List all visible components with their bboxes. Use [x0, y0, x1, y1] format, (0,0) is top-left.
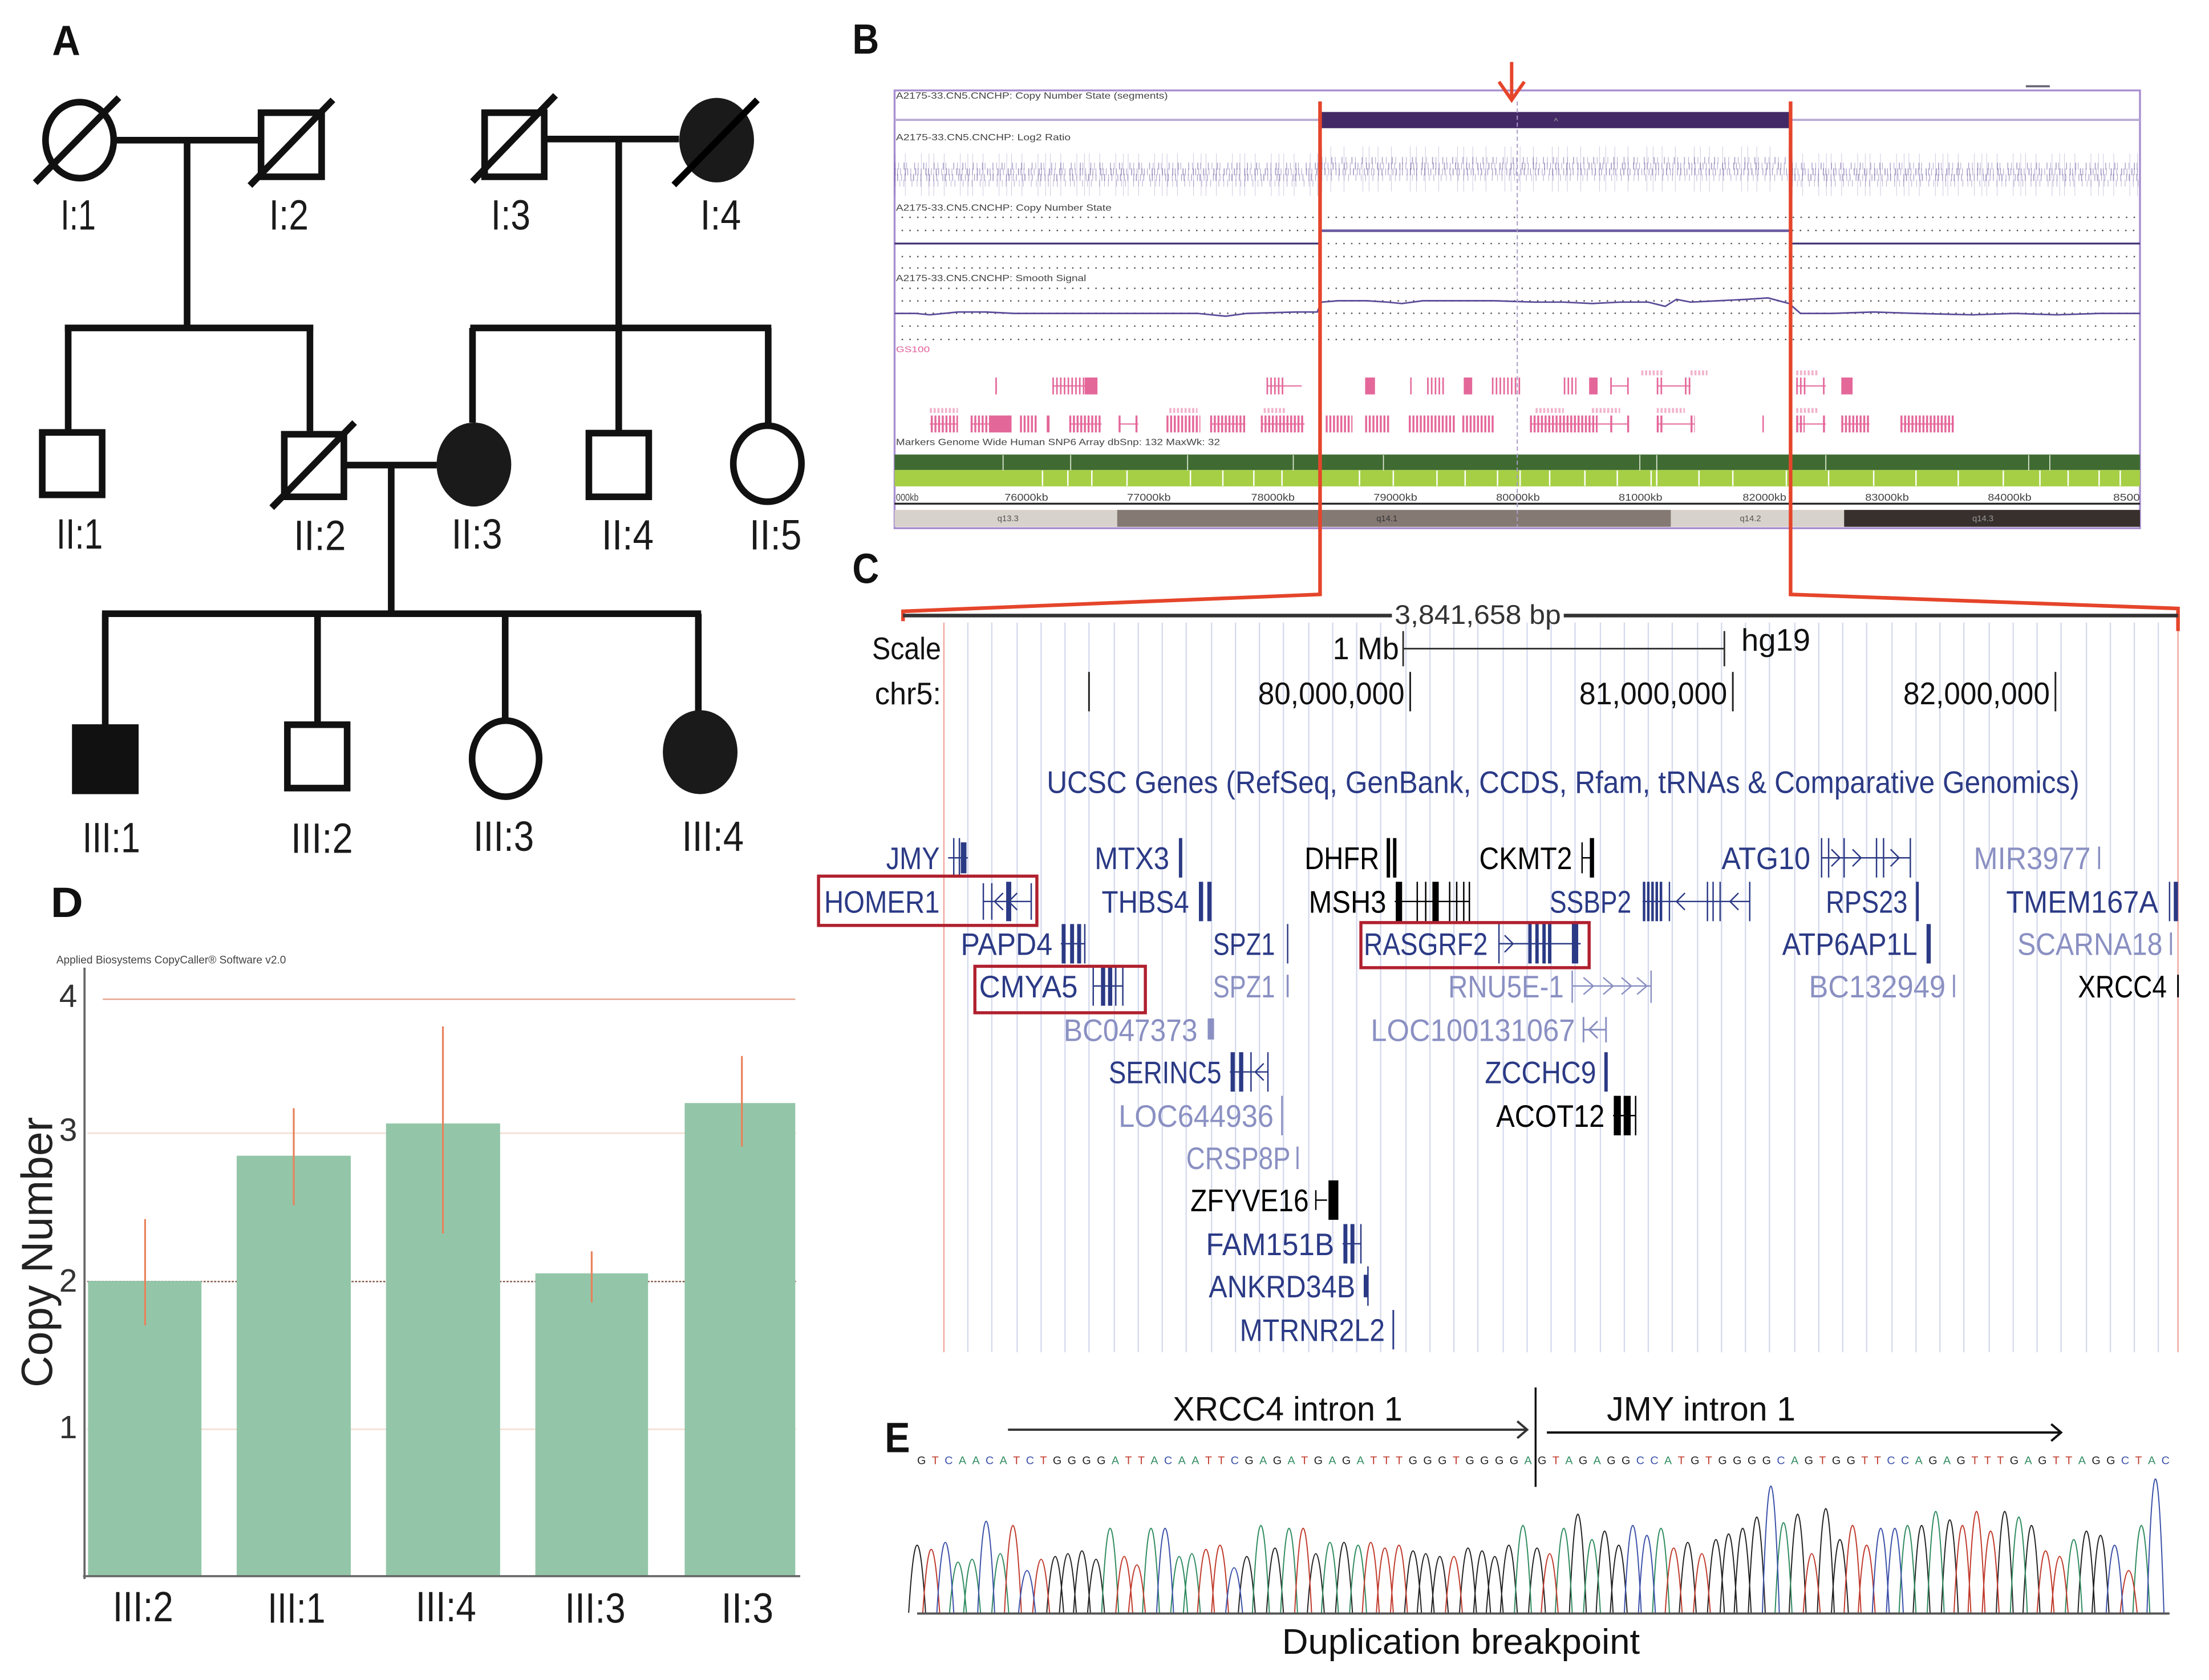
individual I:1: I:1 — [60, 192, 96, 239]
individual I:2 — [250, 100, 333, 239]
individual II:4 — [589, 433, 654, 558]
gene JMY — [886, 838, 968, 878]
scale row: hg19 — [1741, 623, 1810, 658]
panel label C: C — [852, 545, 879, 593]
panel A: pedigree — [35, 17, 801, 862]
breakpoint vertical line — [1535, 1387, 1536, 1487]
genomic coordinate axis: 76000kb — [1004, 492, 1048, 503]
genomic coordinate axis: 000kb — [896, 492, 918, 503]
individual II:2: II:2 — [294, 512, 346, 559]
bar II:3 — [684, 1103, 795, 1576]
bar III:3 — [536, 1273, 648, 1576]
gene RASGRF2 in red box — [1361, 923, 1589, 968]
gene SPZ1 upper: SPZ1 — [1213, 927, 1275, 962]
gene SCARNA18: SCARNA18 — [2017, 927, 2162, 962]
track titles: GS100 — [896, 346, 930, 355]
individual II:5: II:5 — [749, 511, 801, 558]
copy number and smooth signal dotted grid — [902, 217, 2137, 339]
individual II:1: II:1 — [56, 510, 103, 558]
individual I:4 — [674, 98, 757, 239]
segment track with duplication bar — [894, 85, 2140, 128]
gene TMEM167A: TMEM167A — [2006, 885, 2159, 920]
individual I:4: I:4 — [700, 192, 741, 239]
gene CMYA5 in red box — [975, 966, 1145, 1013]
red zoom lines connecting panels B and C — [903, 102, 2178, 631]
pedigree connecting lines — [65, 139, 771, 725]
JMY arrow — [1547, 1424, 2061, 1441]
microarray frame — [894, 91, 2140, 528]
chromatogram traces — [909, 1479, 2164, 1613]
gene ATP6AP1L: ATP6AP1L — [1782, 927, 1918, 962]
individual III:2: III:2 — [291, 815, 353, 862]
individual II:4: II:4 — [602, 511, 654, 558]
gene HOMER1 in red box — [818, 876, 1037, 926]
gene CRSP8P: CRSP8P — [1186, 1141, 1291, 1176]
gene CMYA5 in red box: CMYA5 — [979, 969, 1078, 1004]
genomic coordinate axis: 8500 — [2113, 492, 2140, 503]
gene ZCCHC9: ZCCHC9 — [1485, 1055, 1596, 1090]
bar III:4 — [386, 1123, 500, 1576]
x axis labels: II:3 — [722, 1584, 773, 1632]
gene RASGRF2 in red box: RASGRF2 — [1364, 927, 1487, 962]
panel label A: A — [52, 17, 80, 64]
chromosome cytoband track — [894, 510, 2140, 527]
base call sequence: G T C AA C A T C T GGGG A TT A C AA TT C G A G A T G A G A TTT GGG T GGGG A G T A G A GG CC A T G T GGGG C A G T GG TT CC A G A G TTT G A G TT A GG C T A C — [917, 1455, 2170, 1467]
gene SERINC5: SERINC5 — [1109, 1055, 1222, 1090]
gene ANKRD34B: ANKRD34B — [1209, 1269, 1355, 1304]
y axis numbers: 2 — [59, 1263, 77, 1299]
genomic coordinate axis: 83000kb — [1865, 492, 1909, 503]
bar III:1 — [237, 1156, 351, 1576]
panel label D: D — [51, 879, 83, 926]
individual II:2 — [271, 423, 355, 559]
gene track title: UCSC Genes (RefSeq, GenBank, CCDS, Rfam, tRNAs & Comparative Genomics) — [1047, 765, 2080, 800]
track titles: A2175-33.CN5.CNCHP: Copy Number State — [896, 202, 1112, 213]
individual II:5 — [733, 425, 801, 558]
individual III:3: III:3 — [473, 813, 534, 860]
XRCC4 arrow — [1008, 1421, 1527, 1438]
gene LOC644936: LOC644936 — [1118, 1099, 1274, 1134]
scale row: 1 Mb — [1333, 631, 1399, 666]
x axis labels — [113, 1583, 773, 1632]
gene RPS23: RPS23 — [1826, 885, 1907, 920]
smooth signal trace — [894, 298, 2140, 316]
track titles: Markers Genome Wide Human SNP6 Array dbSnp: 132 MaxWk: 32 — [896, 437, 1220, 448]
genomic coordinate axis: 78000kb — [1251, 492, 1295, 503]
genomic coordinate axis: 80000kb — [1496, 492, 1540, 503]
genomic coordinate axis: 77000kb — [1127, 492, 1171, 503]
genomic coordinate axis: 79000kb — [1373, 492, 1417, 503]
genomic coordinate axis — [894, 492, 2140, 504]
x axis labels: III:2 — [113, 1583, 173, 1630]
individual I:2: I:2 — [269, 192, 309, 239]
genomic coordinate axis: 81000kb — [1619, 492, 1663, 503]
chromatogram baseline — [917, 1613, 2170, 1614]
XRCC4 intron label: XRCC4 intron 1 — [1173, 1390, 1403, 1428]
individual II:3: II:3 — [452, 510, 502, 558]
gene JMY: JMY — [886, 841, 940, 876]
gene LOC100131067: LOC100131067 — [1371, 1013, 1575, 1048]
y axis numbers: 3 — [59, 1113, 77, 1149]
software caption: Applied Biosystems CopyCaller® Software v2.0 — [56, 953, 286, 966]
x axis labels: III:3 — [565, 1584, 626, 1632]
pink gene tracks — [930, 373, 1954, 424]
bar III:2 — [88, 1281, 201, 1576]
duplication breakpoint caption: Duplication breakpoint — [1282, 1622, 1640, 1662]
gene BC132949: BC132949 — [1809, 969, 1945, 1004]
genomic coordinate axis: 84000kb — [1988, 492, 2032, 503]
individual II:3 — [436, 423, 511, 558]
panel B: microarray copy number plot — [852, 15, 2140, 528]
panel C: UCSC genome browser view — [818, 102, 2178, 1352]
error bars — [145, 1026, 742, 1325]
gene MIR3977: MIR3977 — [1974, 841, 2091, 876]
gene SPZ1 lower: SPZ1 — [1213, 969, 1275, 1004]
gene FAM151B: FAM151B — [1206, 1227, 1334, 1262]
x axis labels: III:4 — [416, 1583, 476, 1630]
chromosome cytoband track: q14.3 — [1972, 514, 1993, 524]
gene MTX3: MTX3 — [1095, 841, 1169, 876]
individual II:1 — [42, 432, 103, 558]
chromosome coordinate row: chr5: — [875, 676, 941, 711]
gene DHFR: DHFR — [1304, 841, 1379, 876]
gene SSBP2 — [1550, 882, 1750, 921]
gene ZFYVE16: ZFYVE16 — [1190, 1183, 1309, 1218]
panel D: copy number bar chart — [13, 879, 800, 1632]
browser vertical grid — [944, 623, 2178, 1352]
panel label B: B — [852, 15, 879, 63]
individual I:3 — [472, 95, 556, 239]
gene XRCC4: XRCC4 — [2078, 969, 2167, 1004]
gene PAPD4: PAPD4 — [961, 927, 1052, 962]
chromosome coordinate row — [875, 672, 2056, 711]
gene ATG10 — [1721, 838, 1910, 878]
genomic coordinate axis: 82000kb — [1742, 492, 1786, 503]
track titles: A2175-33.CN5.CNCHP: Smooth Signal — [896, 273, 1086, 283]
JMY intron label: JMY intron 1 — [1607, 1390, 1795, 1428]
gene RNU5E-1: RNU5E-1 — [1448, 969, 1564, 1004]
track titles: A2175-33.CN5.CNCHP: Copy Number State (segments) — [896, 91, 1168, 101]
region size bar: 3,841,658 bp — [1395, 600, 1561, 630]
chromosome coordinate row: 81,000,000 — [1579, 676, 1727, 711]
individual I:3: I:3 — [491, 192, 530, 239]
scale row — [872, 623, 1810, 666]
copy number state line — [894, 243, 2140, 244]
individual III:1 — [72, 724, 140, 861]
gene MSH3 — [1309, 882, 1469, 921]
panel label E: E — [885, 1414, 910, 1462]
green marker tracks — [894, 455, 2140, 486]
chromosome coordinate row: 82,000,000 — [1903, 676, 2050, 711]
individual III:1: III:1 — [82, 814, 140, 861]
gene MTRNR2L2: MTRNR2L2 — [1240, 1313, 1385, 1348]
gene ACOT12: ACOT12 — [1496, 1099, 1604, 1134]
individual III:2 — [287, 725, 353, 862]
y axis numbers — [59, 979, 77, 1446]
chromosome cytoband track: q13.3 — [998, 514, 1019, 524]
y axis numbers: 4 — [59, 979, 77, 1015]
gene CKMT2: CKMT2 — [1480, 841, 1572, 876]
red arrow — [1499, 62, 1525, 100]
chromosome cytoband track: q14.2 — [1740, 514, 1761, 524]
gene RNU5E-1 — [1448, 969, 1651, 1004]
gene ATG10: ATG10 — [1721, 841, 1810, 876]
chromosome cytoband track: q14.1 — [1376, 514, 1397, 524]
panel E: sequencing chromatogram — [885, 1387, 2170, 1662]
x axis labels: III:1 — [267, 1584, 326, 1632]
chromosome coordinate row: 80,000,000 — [1258, 676, 1405, 711]
scale row: Scale — [872, 631, 941, 666]
log2 ratio scatter — [894, 161, 2140, 183]
gene MSH3: MSH3 — [1309, 885, 1387, 920]
track titles: A2175-33.CN5.CNCHP: Log2 Ratio — [896, 132, 1071, 143]
individual III:3 — [472, 721, 539, 860]
axes — [83, 968, 800, 1579]
chart gridlines — [87, 999, 796, 1429]
gene BC047373: BC047373 — [1064, 1013, 1198, 1048]
gene THBS4: THBS4 — [1102, 885, 1189, 920]
centre position dashed marker — [1517, 102, 1518, 527]
y axis title: Copy Number — [13, 1117, 62, 1387]
track titles — [896, 91, 1220, 448]
segment track with duplication bar: ^ — [1554, 117, 1558, 126]
individual III:4: III:4 — [682, 813, 744, 860]
gene SSBP2: SSBP2 — [1550, 885, 1631, 920]
individual I:1 — [35, 98, 119, 239]
gene HOMER1 in red box: HOMER1 — [824, 885, 940, 920]
individual III:4 — [663, 710, 744, 860]
y axis numbers: 1 — [59, 1410, 77, 1446]
